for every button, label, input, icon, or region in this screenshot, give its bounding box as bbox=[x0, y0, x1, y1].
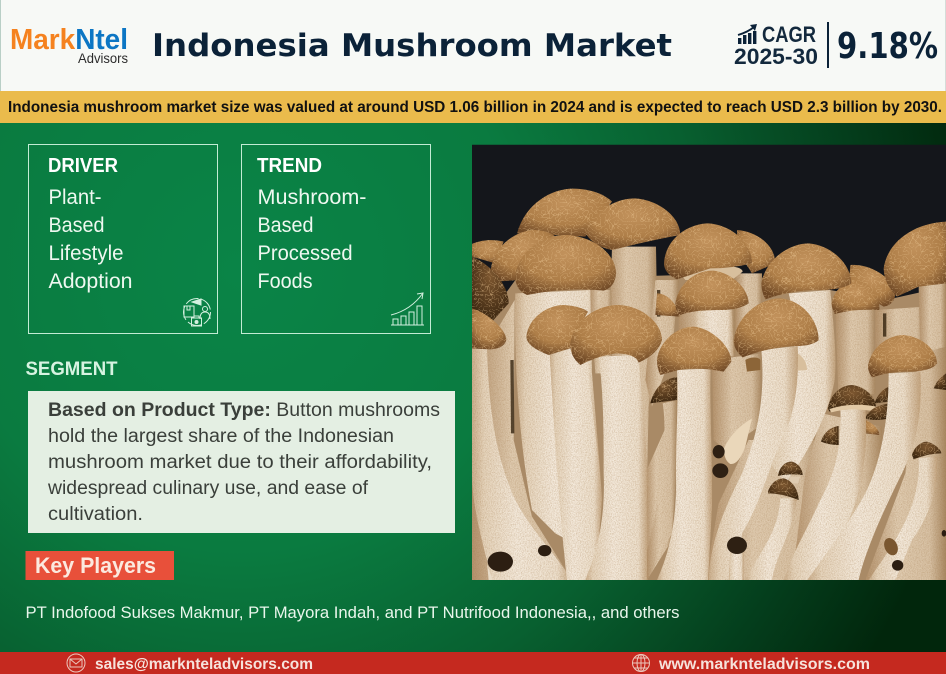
far-left mushroom bbox=[472, 308, 572, 580]
email address: sales@marknteladvisors.com bbox=[95, 656, 313, 673]
mushroom with small cap T bbox=[784, 385, 876, 580]
panel: driver: Based bbox=[48, 214, 104, 237]
website address: www.marknteladvisors.com bbox=[658, 656, 870, 673]
shadow gaps bbox=[512, 290, 885, 433]
header band bbox=[0, 0, 946, 91]
panel: trend: TREND bbox=[257, 155, 322, 177]
title: Indonesia Mushroom Market bbox=[152, 28, 672, 64]
small back bud with stem bbox=[647, 377, 677, 580]
panel: driver: Lifestyle bbox=[48, 242, 124, 265]
tan bud bbox=[724, 418, 752, 464]
panel: segment description: hold the largest share of the Indonesian bbox=[48, 426, 394, 447]
small base buds bbox=[487, 530, 946, 580]
panel: segment description bbox=[28, 391, 455, 533]
icon: growth chart bbox=[391, 293, 424, 325]
summary banner bbox=[0, 91, 946, 123]
panel: segment description: cultivation. bbox=[48, 504, 143, 525]
back stems bbox=[472, 247, 946, 580]
panel: trend: Based bbox=[258, 214, 314, 237]
green background bbox=[0, 123, 946, 653]
far-right small mushroom bbox=[869, 442, 941, 580]
panel: segment description: mushroom market due to their affordability, bbox=[48, 452, 432, 473]
back caps bbox=[472, 189, 895, 322]
CAGR block: CAGR bbox=[762, 22, 816, 47]
front left mushrooms bbox=[526, 305, 662, 580]
panel: trend: Mushroom- bbox=[258, 186, 366, 209]
segment heading: SEGMENT bbox=[26, 359, 118, 380]
summary banner: Indonesia mushroom market size was valued at around USD 1.06 billion in 2024 and is expected to reach USD 2.3 billion by 2030. bbox=[8, 99, 942, 116]
key players list: PT Indofood Sukses Makmur, PT Mayora Indah, and PT Nutrifood Indonesia,, and others bbox=[26, 603, 680, 622]
panel: segment description: widespread culinary use, and ease of bbox=[47, 478, 369, 499]
panel: driver: DRIVER bbox=[48, 155, 119, 177]
middle mushrooms bbox=[515, 222, 946, 557]
logo: Advisors bbox=[78, 50, 128, 66]
panel: driver bbox=[28, 144, 218, 334]
tiny mushroom pair V W bbox=[727, 462, 803, 580]
right mushroom S bbox=[807, 335, 937, 580]
CAGR block bbox=[734, 22, 938, 69]
dark small caps bbox=[712, 373, 946, 478]
icon: globe bbox=[632, 654, 650, 672]
panel: trend bbox=[242, 144, 430, 334]
footer bar bbox=[0, 652, 946, 674]
key players label: Key Players bbox=[35, 553, 156, 578]
panel: segment description: Based on Product Type: Button mushrooms bbox=[48, 400, 440, 421]
central right mushroom bbox=[709, 298, 819, 580]
panel: driver: Adoption bbox=[48, 270, 132, 293]
icon: rising bars bbox=[738, 24, 757, 44]
mushroom photo bbox=[472, 145, 946, 580]
center mushroom bbox=[657, 327, 731, 580]
panel: driver: Plant- bbox=[48, 186, 102, 209]
CAGR block: 2025-30 bbox=[734, 44, 818, 69]
logo: MarkNtel bbox=[10, 24, 128, 56]
icon: email bbox=[67, 654, 85, 672]
panel: trend: Foods bbox=[258, 270, 312, 293]
panel: trend: Processed bbox=[258, 242, 352, 265]
icon: lifestyle circle bbox=[184, 298, 210, 326]
